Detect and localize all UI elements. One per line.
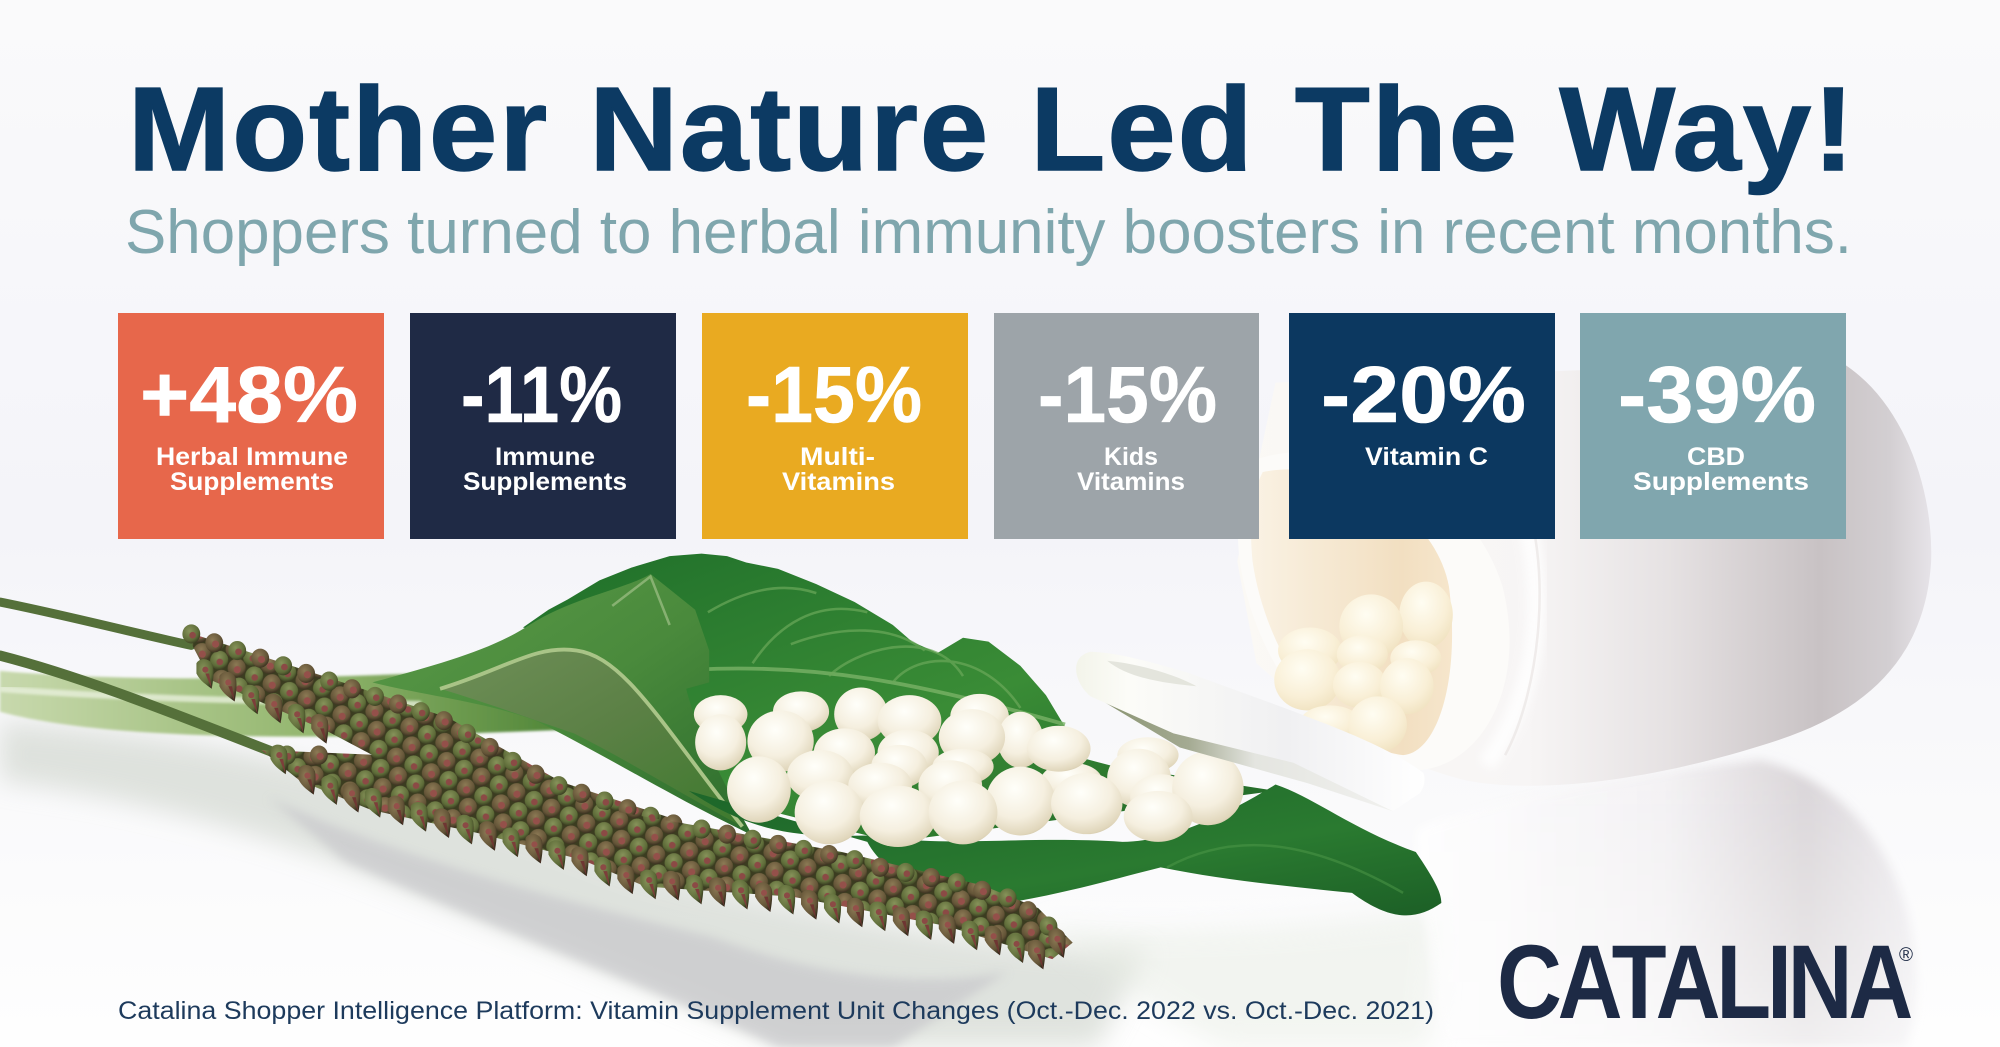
box: immune supplements: Immune (495, 443, 595, 471)
front curled leaf (372, 574, 753, 835)
box: multi-vitamins: -15% (746, 350, 922, 439)
bottle body (1237, 360, 1931, 786)
photo: herbal leaves, pills and open bottle (0, 360, 1931, 1047)
title: Mother Nature Led The Way! (128, 63, 1856, 196)
box: multi-vitamins (702, 313, 968, 539)
box: immune supplements: Supplements (463, 468, 627, 496)
box: kids vitamins: -15% (1038, 350, 1217, 439)
box: immune supplements (410, 313, 676, 539)
back leaf (523, 554, 1276, 842)
source note: Catalina Shopper Intelligence Platform: Vitamin Supplement Unit Changes (Oct.-Dec. 2022 vs. Oct.-Dec. 2021) (118, 997, 1434, 1025)
box: vitamin c (1289, 313, 1555, 539)
lower leaves (689, 784, 1441, 915)
seed head: lower (261, 745, 1073, 969)
box: cbd supplements (1580, 313, 1846, 539)
subtitle: Shoppers turned to herbal immunity boosters in recent months. (125, 198, 1852, 267)
box: kids vitamins (994, 313, 1259, 539)
open white bottle (1237, 360, 1931, 786)
box: herbal immune supplements: Herbal Immune (156, 443, 348, 471)
stat boxes (118, 313, 1846, 539)
box: vitamin c: Vitamin C (1365, 443, 1488, 471)
box: cbd supplements: -39% (1618, 350, 1816, 439)
box: kids vitamins: Kids (1104, 443, 1158, 471)
cap underside (1103, 702, 1407, 811)
logo: catalina: CATALINA (1497, 924, 1912, 1041)
box: vitamin c: -20% (1321, 350, 1526, 439)
bottle mouth (1251, 469, 1452, 755)
seed head: upper (182, 624, 682, 880)
pills on leaf (694, 687, 1244, 847)
reflection: seed stems and leaves (0, 722, 1441, 1047)
bottle cap (1076, 652, 1424, 811)
grass blades (0, 671, 568, 737)
box: herbal immune supplements: Supplements (170, 468, 334, 496)
box: herbal immune supplements: +48% (140, 350, 358, 439)
cap inner lip (1107, 661, 1196, 686)
box: multi-vitamins: Vitamins (782, 468, 895, 496)
logo: catalina: ® (1899, 945, 1913, 966)
bottle neck shading (1486, 459, 1537, 765)
cap lid (1076, 652, 1424, 811)
bottle rim (1238, 452, 1509, 770)
box: kids vitamins: Vitamins (1077, 468, 1185, 496)
box: herbal immune supplements (118, 313, 384, 539)
box: cbd supplements: Supplements (1633, 468, 1809, 496)
box: multi-vitamins: Multi- (800, 443, 875, 471)
reflection: bottle (1646, 758, 1912, 1046)
box: cbd supplements: CBD (1687, 443, 1745, 471)
seed stems (0, 602, 274, 753)
pills in bottle (1274, 582, 1453, 753)
box: immune supplements: -11% (461, 350, 622, 439)
